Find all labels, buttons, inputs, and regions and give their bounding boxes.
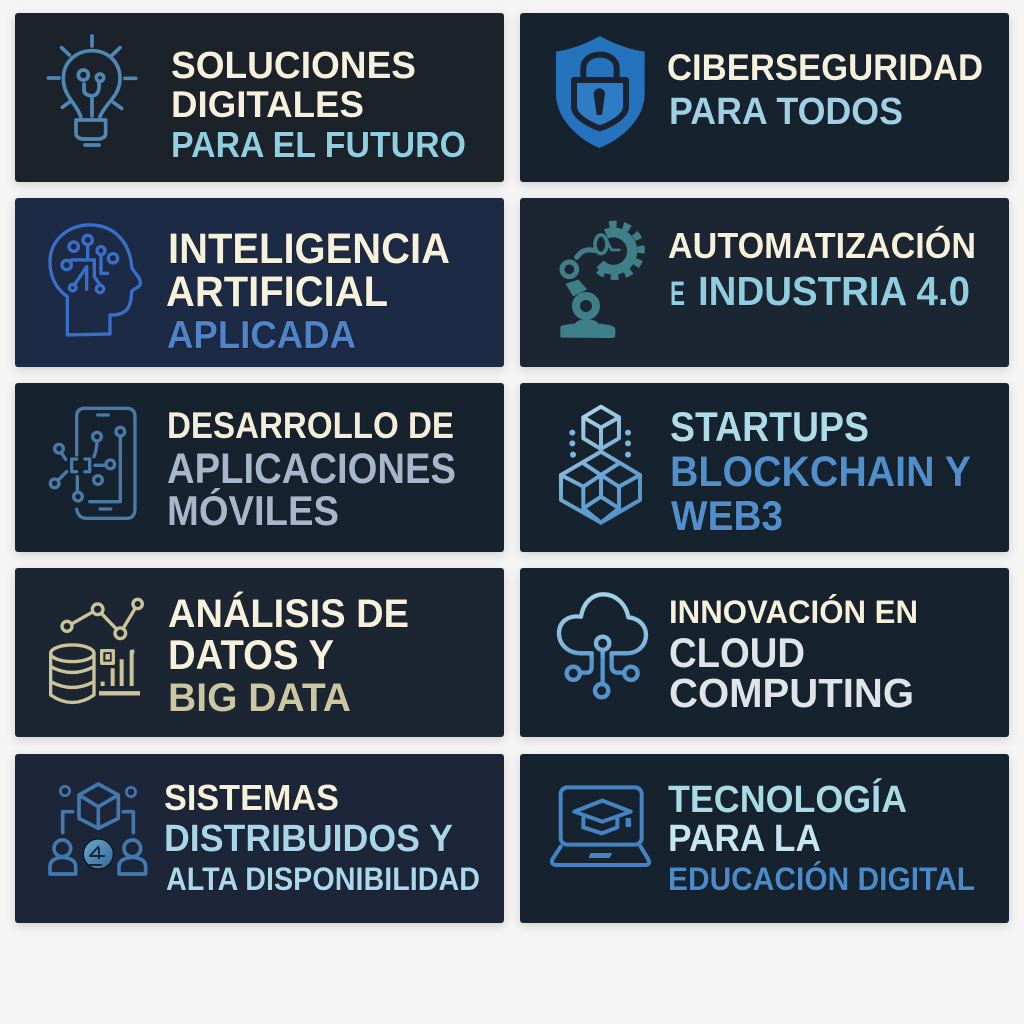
- icon: robot arm and gear: [561, 224, 641, 338]
- panel: innovación en cloud: [520, 568, 1009, 737]
- icon: cloud network: [559, 594, 646, 697]
- heading: análisis de datos y big data: BIG DATA: [168, 676, 351, 720]
- heading: sistemas distribuidos: [164, 777, 480, 897]
- heading: ciberseguridad: CIBERSEGURIDAD: [667, 47, 983, 88]
- heading: tecnología para la educación digital: TECNOLOGÍA: [668, 777, 907, 821]
- panel: desarrollo de aplicaciones móviles: [15, 383, 504, 552]
- panel: inteligencia artificial: [15, 198, 504, 367]
- heading: ciberseguridad: PARA TODOS: [669, 91, 903, 133]
- heading: análisis de datos y big data: DATOS Y: [168, 631, 334, 678]
- panel: automatización: [520, 198, 1009, 367]
- heading: automatización: [668, 224, 976, 314]
- heading: sistemas distribuidos: SISTEMAS: [164, 777, 339, 818]
- heading: análisis de datos y big data: ANÁLISIS DE: [168, 591, 409, 636]
- icon: database and charts: [51, 599, 142, 702]
- panel: tecnología educación: [520, 754, 1009, 923]
- heading: desarrollo de aplicaciones móviles: APLICACIONES: [167, 445, 456, 493]
- heading: tecnología para la educación digital: EDUCACIÓN DIGITAL: [668, 861, 975, 897]
- heading: startups blockchain web3: BLOCKCHAIN Y: [670, 448, 971, 496]
- icon: laptop with graduation cap: [552, 787, 649, 865]
- heading: soluciones digitales: PARA EL FUTURO: [171, 124, 466, 165]
- icon: light bulb: [48, 36, 136, 145]
- icon: shield with padlock: [556, 36, 645, 148]
- heading: sistemas distribuidos: DISTRIBUIDOS Y: [164, 818, 453, 860]
- icon: distributed cube and users: [50, 784, 146, 874]
- heading: tecnología para la educación digital: PARA LA: [668, 818, 821, 860]
- heading: soluciones digitales: [171, 45, 466, 165]
- heading: automatización: AUTOMATIZACIÓN: [668, 224, 976, 266]
- heading: inteligencia artificial: INTELIGENCIA: [168, 225, 450, 273]
- heading: inteligencia artificial: APLICADA: [167, 314, 356, 357]
- heading: automatización: E: [670, 275, 685, 313]
- heading: desarrollo de aplicaciones móviles: [167, 405, 456, 534]
- heading: soluciones digitales: DIGITALES: [171, 84, 364, 125]
- panel: soluciones digitales: [15, 13, 504, 182]
- heading: startups blockchain web3: WEB3: [671, 492, 783, 539]
- heading: ciberseguridad: [667, 47, 983, 133]
- heading: innovación en cloud computing: COMPUTING: [669, 670, 914, 716]
- heading: automatización: INDUSTRIA 4.0: [698, 268, 970, 314]
- heading: startups blockchain web3: [670, 403, 971, 539]
- panel: análisis de datos: [15, 568, 504, 737]
- heading: tecnología para la educación digital: [668, 777, 975, 897]
- heading: soluciones digitales: SOLUCIONES: [171, 45, 416, 87]
- panel: startups blockchain: [520, 383, 1009, 552]
- heading: innovación en cloud computing: INNOVACIÓN EN: [669, 594, 918, 630]
- heading: desarrollo de aplicaciones móviles: DESARROLLO DE: [167, 405, 454, 446]
- icon: smartphone with circuit: [50, 408, 135, 518]
- heading: análisis de datos y big data: [168, 591, 409, 720]
- icon: head with circuits: [50, 225, 140, 335]
- heading: sistemas distribuidos: ALTA DISPONIBILIDAD: [166, 861, 480, 897]
- heading: startups blockchain web3: STARTUPS: [670, 403, 869, 450]
- heading: inteligencia artificial: ARTIFICIAL: [166, 268, 388, 316]
- panel: sistemas distribuidos: [15, 754, 504, 923]
- icon: blockchain cubes: [561, 407, 640, 523]
- heading: desarrollo de aplicaciones móviles: MÓVILES: [167, 486, 339, 534]
- heading: inteligencia artificial: [166, 225, 450, 357]
- heading: innovación en cloud computing: [669, 594, 918, 716]
- heading: innovación en cloud computing: CLOUD: [669, 629, 805, 676]
- panel: ciberseguridad: [520, 13, 1009, 182]
